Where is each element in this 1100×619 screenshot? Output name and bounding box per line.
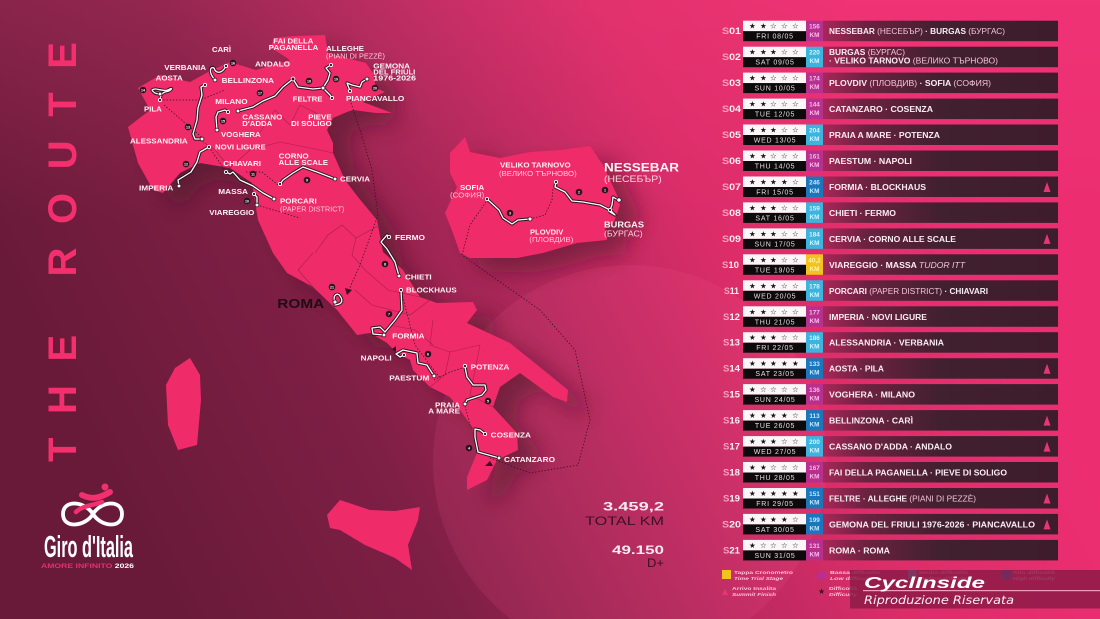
stage S04: S04 [722, 104, 741, 114]
stage S01: KM [810, 32, 819, 39]
logo tagline: AMORE INFINITO 2026 [41, 563, 135, 570]
labels: Bulgaria: (БУРГАС) [604, 230, 643, 238]
stage S02 [722, 47, 1058, 67]
stage S21: KM [810, 551, 819, 558]
stage S11: PORCARI (PAPER DISTRICT) · CHIAVARI [829, 287, 988, 296]
labels: northern Italy: FAI DELLA [273, 39, 313, 46]
stage S03 [722, 73, 1058, 93]
stage S15: SUN 24/05 [754, 397, 796, 404]
legend: low difficulty [818, 570, 881, 581]
stage S09: 184 [809, 231, 820, 238]
stage S05: PRAIA A MARE · POTENZA [829, 131, 940, 140]
labels: northern Italy: ALESSANDRIA [130, 139, 188, 146]
stage S12 [723, 306, 1058, 327]
legend: difficulty stars [818, 586, 858, 597]
labels: central and southern Italy: FERMO [395, 235, 426, 242]
stage number badges: 17 [258, 91, 262, 95]
stage S12: THU 21/05 [755, 319, 795, 326]
stage S07: ★★★★☆ [749, 178, 799, 186]
stage S04: ★★☆☆☆ [749, 100, 799, 109]
stage S20: S20 [722, 519, 741, 529]
stage S05 [722, 124, 1058, 145]
labels: northern Italy: (PIANI DI PEZZÈ) [326, 51, 385, 60]
stage S13: ALESSANDRIA · VERBANIA [829, 339, 944, 348]
labels: northern Italy: PORCARI [280, 198, 317, 205]
legend [722, 570, 1056, 597]
stage number badges: 13 [186, 125, 190, 129]
route S06 [396, 350, 434, 376]
legend: low difficulty: Bassa difficoltà [830, 570, 881, 575]
route S13 [193, 85, 205, 139]
stage number badges: 4 [468, 446, 470, 450]
totals [585, 502, 664, 570]
stage S21: 131 [809, 543, 820, 550]
stage S02: SAT 09/05 [755, 60, 795, 67]
stage S02: KM [810, 58, 819, 65]
stage S11: KM [810, 292, 819, 299]
stage S10 [722, 254, 1058, 275]
labels: Bulgaria: PLOVDIV [530, 229, 564, 236]
stage S09: S09 [722, 234, 741, 244]
stage S18: THU 28/05 [755, 475, 795, 482]
stage S19: FELTRE · ALLEGHE (PIANI DI PEZZÈ) [829, 494, 976, 504]
stage S09: CERVIA · CORNO ALLE SCALE [829, 235, 956, 244]
route S20 [347, 79, 367, 91]
stage S08 [722, 202, 1058, 223]
labels: central and southern Italy: FORMIA [392, 333, 425, 340]
stage S20: ★★★★☆ [749, 515, 799, 524]
stage S01: ★★☆☆☆ [749, 22, 799, 31]
stage S08: KM [810, 214, 819, 221]
stage S21: S21 [723, 545, 740, 555]
legend: difficulty stars: ★ [818, 587, 825, 596]
stage S08: S08 [722, 208, 741, 218]
stage S09: ★★★☆☆ [749, 229, 799, 238]
map: Italy mainland [128, 35, 568, 490]
stage S16: TUE 26/05 [755, 423, 795, 430]
stage S05: 204 [809, 128, 820, 134]
stage S19: ★★★★★ [749, 489, 799, 498]
route S03 [487, 199, 530, 224]
stage S19: 151 [809, 491, 820, 498]
labels: central and southern Italy: CHIETI [405, 274, 432, 281]
stage number badges: 9 [306, 178, 308, 182]
labels: northern Italy [130, 39, 416, 217]
stage S02: BURGAS (БУРГАС) [829, 48, 905, 57]
stage S07: KM [810, 188, 819, 195]
labels: northern Italy: VOGHERA [221, 132, 261, 139]
stage S12: IMPERIA · NOVI LIGURE [829, 313, 927, 322]
labels: central and southern Italy: CATANZARO [504, 457, 556, 464]
stage S02: 220 [809, 50, 820, 57]
stage S14: 133 [809, 361, 820, 368]
labels: central and southern Italy: POTENZA [471, 364, 509, 371]
stage S05: KM [810, 136, 819, 143]
map: Sardinia [166, 358, 201, 450]
labels: Bulgaria: (ПЛОВДИВ) [529, 237, 573, 244]
stage S14 [723, 358, 1058, 379]
stage S17: WED 27/05 [754, 449, 796, 456]
stage S11: S11 [724, 286, 739, 296]
stage S16: S16 [723, 416, 740, 426]
stage number badges: 18 [307, 79, 311, 83]
labels: northern Italy: CHIAVARI [223, 161, 261, 168]
legend: medium difficulty [908, 570, 969, 581]
stage S12: S12 [723, 312, 740, 322]
stage S12: ★★☆☆☆ [749, 307, 799, 316]
stage S21 [723, 540, 1058, 560]
stage S21: SUN 31/05 [754, 553, 796, 560]
stage S05: ★★★☆☆ [749, 126, 799, 134]
stage S01: FRI 08/05 [756, 34, 794, 41]
stage S10: ★★★☆☆ [749, 255, 799, 264]
stage S10: TUE 19/05 [755, 267, 795, 274]
watermark: CyclInside [850, 570, 1100, 608]
stage S08: 159 [809, 205, 820, 212]
stage S17: CASSANO D'ADDA · ANDALO [829, 443, 952, 452]
stage S01: NESSEBAR (НЕСЕБЪР) · BURGAS (БУРГАС) [829, 27, 1005, 36]
stage S04: 144 [809, 102, 820, 109]
labels: northern Italy: CASSANO [242, 114, 283, 121]
route S09 [280, 167, 335, 184]
stage S15: 136 [809, 387, 820, 394]
labels: northern Italy: PIANCAVALLO [346, 96, 405, 103]
stage number badges: 15 [221, 119, 225, 123]
labels: Bulgaria: (НЕСЕБЪР) [604, 174, 662, 185]
watermark: CyclInside: CyclInside [864, 575, 985, 592]
stage S16: KM [810, 422, 819, 429]
labels: northern Italy: FELTRE [293, 97, 323, 104]
stage S05: WED 13/05 [754, 138, 796, 144]
stage S05: S05 [722, 130, 741, 140]
stage number badges: 2 [578, 190, 580, 194]
stage S18: ★★☆☆☆ [749, 463, 799, 472]
stage S13: S13 [723, 338, 740, 348]
stage S09: SUN 17/05 [754, 241, 796, 248]
stage S08: CHIETI · FERMO [829, 209, 896, 218]
route S07 [372, 290, 402, 335]
background circle [433, 265, 827, 619]
stage S20: SAT 30/05 [755, 527, 795, 534]
watermark: CyclInside: Riproduzione Riservata [864, 593, 1014, 607]
stage S10: KM [810, 266, 819, 273]
labels: northern Italy: PIEVE [308, 115, 332, 122]
stage S01: S01 [722, 26, 741, 36]
legend: time trial: Time Trial Stage [734, 576, 784, 581]
legend: time trial: Tappa Cronometro [734, 570, 793, 575]
stage S15: ★☆☆☆☆ [749, 385, 799, 394]
stage S14: KM [810, 370, 819, 377]
legend: time trial [722, 570, 793, 581]
stage number badges: 11 [251, 172, 255, 176]
stage S16: ★★★★☆ [749, 411, 799, 420]
stage S06: KM [810, 162, 819, 169]
stage S10: 40,2 [808, 257, 821, 264]
route S10 [254, 194, 257, 205]
labels: northern Italy: D'ADDA [242, 121, 272, 128]
stage S21: ★☆☆☆☆ [749, 541, 799, 550]
stage S15: S15 [723, 390, 740, 400]
route S16 [210, 66, 226, 80]
route S12 [178, 147, 209, 186]
stage S18: S18 [723, 468, 740, 478]
stage S04 [722, 99, 1058, 119]
stage S15: VOGHERA · MILANO [829, 391, 915, 400]
stage S21: ROMA · ROMA [829, 546, 890, 555]
labels: northern Italy: VIAREGGIO [209, 210, 255, 217]
labels: northern Italy: CORNO [279, 154, 309, 161]
stage S01 [722, 21, 1058, 41]
labels: northern Italy: ALLE SCALE [279, 160, 328, 167]
stage S09 [722, 228, 1058, 249]
labels: northern Italy: 1976-2026 [373, 76, 416, 83]
labels: northern Italy: IMPERIA [139, 186, 173, 193]
labels: northern Italy: GEMONA [373, 63, 410, 70]
stage S19: KM [810, 500, 819, 506]
logo wordmark: Giro d'Italia [44, 529, 133, 564]
stage S01: 156 [809, 24, 820, 31]
stage S10: VIAREGGIO · MASSA TUDOR ITT [829, 261, 966, 270]
stage S02: · VELIKO TARNOVO (ВЕЛИКО ТЪРНОВО) [829, 56, 998, 65]
route S01 [610, 197, 618, 215]
route S18 [293, 79, 332, 98]
stage S12: KM [810, 318, 819, 325]
labels: northern Italy: AOSTA [156, 75, 183, 82]
stage S02: S02 [722, 52, 741, 62]
stage number badges: 16 [231, 61, 235, 65]
labels: northern Italy: MASSA [218, 189, 248, 196]
legend: summit finish: Arrivo Insalita [732, 586, 777, 591]
stage S06: PAESTUM · NAPOLI [829, 157, 912, 166]
stage S10: S10 [722, 260, 739, 270]
route S19 [323, 65, 331, 88]
stage number badges: 8 [384, 262, 386, 266]
labels: northern Italy: NOVI LIGURE [215, 144, 266, 151]
labels: northern Italy: BELLINZONA [222, 78, 274, 85]
labels: Bulgaria [450, 162, 680, 244]
legend: summit finish: Summit Finish [732, 592, 776, 597]
labels: northern Italy: PILA [144, 107, 162, 114]
legend: difficulty stars: Difficoltà [829, 586, 858, 591]
stage number badges: 20 [373, 86, 377, 90]
stage S16: BELLINZONA · CARÌ [829, 417, 913, 426]
elevation label: D+ [647, 558, 664, 570]
stage number badges: 10 [245, 199, 249, 203]
stage S14: AOSTA · PILA [829, 365, 884, 374]
stage S13: 186 [809, 335, 820, 342]
stage S14: SAT 23/05 [755, 371, 795, 378]
stage S06: THU 14/05 [755, 164, 795, 170]
labels: central and southern Italy: COSENZA [491, 432, 531, 439]
stage S18 [723, 462, 1058, 482]
stage S12: 177 [809, 309, 820, 316]
labels: northern Italy: PAGANELLA [269, 45, 318, 52]
labels: northern Italy: ALLEGHE [326, 46, 364, 53]
stage S11: WED 20/05 [754, 293, 796, 300]
legend: low difficulty: Low difficulty [830, 576, 875, 581]
route S21 [334, 294, 342, 305]
stage start and finish markers [158, 63, 621, 460]
stage S15: KM [810, 396, 819, 403]
map: Bulgaria [445, 137, 620, 258]
total km label: TOTAL KM [585, 516, 664, 528]
stage number badges: 1 [604, 188, 606, 192]
land shadows [148, 49, 640, 504]
route S15 [216, 110, 228, 130]
stage S09: KM [810, 240, 819, 247]
labels: northern Italy: (PAPER DISTRICT) [280, 206, 344, 213]
labels: central and southern Italy: PRAIA [435, 402, 460, 409]
stage number badges: 7 [388, 312, 390, 316]
stage number badges: 14 [141, 88, 145, 92]
route S05 [465, 367, 486, 404]
labels: central and southern Italy: PAESTUM [389, 375, 429, 382]
stage S03: 174 [809, 76, 820, 83]
stage S03: SUN 10/05 [754, 86, 796, 93]
labels: central and southern Italy: NAPOLI [361, 355, 392, 362]
stage number badges: 5 [487, 399, 489, 403]
legend: high difficulty: Alta difficoltà [1013, 570, 1056, 575]
route S14 [152, 88, 172, 100]
stage S17: ★★★☆☆ [749, 437, 799, 446]
labels: Bulgaria: (СОФИЯ) [450, 193, 484, 200]
stage S17: KM [810, 448, 819, 455]
labels: northern Italy: VERBANIA [164, 65, 206, 72]
background top glow [0, 0, 1100, 220]
route S11 [226, 172, 274, 199]
labels: central and southern Italy: BLOCKHAUS [406, 288, 457, 295]
stage S07: S07 [722, 182, 741, 192]
stage S07 [722, 176, 1058, 197]
stage S16: 113 [809, 413, 820, 420]
stage S04: CATANZARO · COSENZA [829, 105, 933, 114]
elevation value: 49.150 [612, 545, 664, 557]
legend: summit finish [722, 586, 777, 597]
map: Sicily [327, 500, 420, 570]
stage S03: S03 [722, 78, 741, 88]
labels: Bulgaria: BURGAS [604, 219, 644, 229]
logo: Giro d'Italia [41, 484, 135, 570]
stage number badges: 6 [427, 352, 429, 356]
stage S17: S17 [723, 442, 740, 452]
legend: high difficulty [1002, 570, 1056, 581]
labels: central and southern Italy: A MARE [428, 409, 460, 416]
legend: difficulty stars: Difficulty [829, 592, 858, 597]
stage S02: ★★★☆☆ [749, 48, 799, 57]
icon: cyclist [76, 484, 110, 512]
stage S11: ★★★☆☆ [749, 281, 799, 290]
labels: Bulgaria: NESSEBAR [604, 162, 680, 174]
legend: medium difficulty: Media difficoltà [919, 570, 969, 575]
stage S20: KM [810, 525, 819, 532]
stage S20: GEMONA DEL FRIULI 1976-2026 · PIANCAVALLO [829, 520, 1035, 529]
stage S03: PLOVDIV (ПЛОВДИВ) · SOFIA (СОФИЯ) [829, 79, 991, 88]
stage S13: FRI 22/05 [756, 345, 794, 352]
stage S14: S14 [723, 364, 740, 374]
labels: Bulgaria: VELIKO TARNOVO [500, 163, 571, 170]
labels: Bulgaria: SOFIA [460, 185, 484, 192]
labels: northern Italy: CARÌ [212, 45, 231, 54]
route S17 [238, 79, 293, 111]
stage routes [152, 65, 618, 458]
stage S19: S19 [723, 494, 740, 504]
stage S07: 246 [809, 180, 820, 186]
stage S13: ★★★☆☆ [749, 333, 799, 342]
legend: high difficulty: High difficulty [1013, 576, 1056, 581]
stage number badges: 3 [509, 211, 511, 215]
stage S19 [723, 488, 1058, 508]
stage S18: FAI DELLA PAGANELLA · PIEVE DI SOLIGO [829, 468, 1007, 478]
stage S08: ★★★☆☆ [749, 203, 799, 212]
regional borders [200, 105, 493, 407]
stage number badges: 19 [334, 77, 338, 81]
labels: central and southern Italy [277, 235, 556, 464]
stage S08: SAT 16/05 [755, 215, 795, 222]
total km value: 3.459,2 [603, 502, 664, 514]
stage S06: 161 [809, 154, 820, 160]
stage S15 [723, 384, 1058, 405]
labels: northern Italy: DEL FRIULI [373, 70, 415, 76]
stage S19: FRI 29/05 [756, 501, 794, 508]
labels: northern Italy: ANDALO [255, 62, 291, 69]
stage S04: TUE 12/05 [755, 112, 795, 119]
stage table [722, 21, 1058, 560]
labels: northern Italy: MILANO [215, 99, 248, 106]
stage S16 [723, 410, 1058, 431]
route S08 [381, 235, 399, 276]
labels: central and southern Italy: ROMA [277, 297, 324, 311]
stage S17: 200 [809, 439, 820, 446]
stage S03: ★★☆☆☆ [749, 74, 799, 83]
stage S13: KM [810, 344, 819, 351]
stage S11: 178 [809, 283, 820, 290]
stage S14: ★★★★★ [749, 359, 799, 368]
transfer lines (dotted) [160, 90, 590, 473]
stage S07: FORMIA · BLOCKHAUS [829, 183, 926, 192]
stage number badges [140, 60, 608, 451]
stage S07: FRI 15/05 [756, 190, 794, 196]
legend: medium difficulty: Medium difficulty [919, 576, 969, 581]
route S02 [555, 182, 610, 210]
stage S20 [722, 514, 1058, 534]
stage S18: 167 [809, 465, 820, 472]
stage S06: ★★☆☆☆ [749, 152, 799, 160]
labels: northern Italy: CERVIA [340, 177, 370, 184]
stage S03: KM [810, 84, 819, 91]
labels: northern Italy: DI SOLIGO [291, 121, 332, 128]
icon: infinity wheels [63, 503, 122, 525]
stage number badges: 21 [330, 285, 334, 289]
stage S17 [723, 436, 1058, 457]
stage number badges: 12 [184, 162, 188, 166]
stage S18: KM [810, 474, 819, 480]
labels: Bulgaria: (ВЕЛИКО ТЪРНОВО) [499, 171, 577, 178]
stage S04: KM [810, 110, 819, 117]
stage S06: S06 [722, 156, 741, 166]
title: THE ROUTE [41, 42, 85, 462]
stage S11 [724, 280, 1058, 301]
stage S20: 199 [809, 517, 820, 524]
stage S06 [722, 150, 1058, 171]
route S04 [475, 429, 499, 458]
stage S13 [723, 332, 1058, 353]
